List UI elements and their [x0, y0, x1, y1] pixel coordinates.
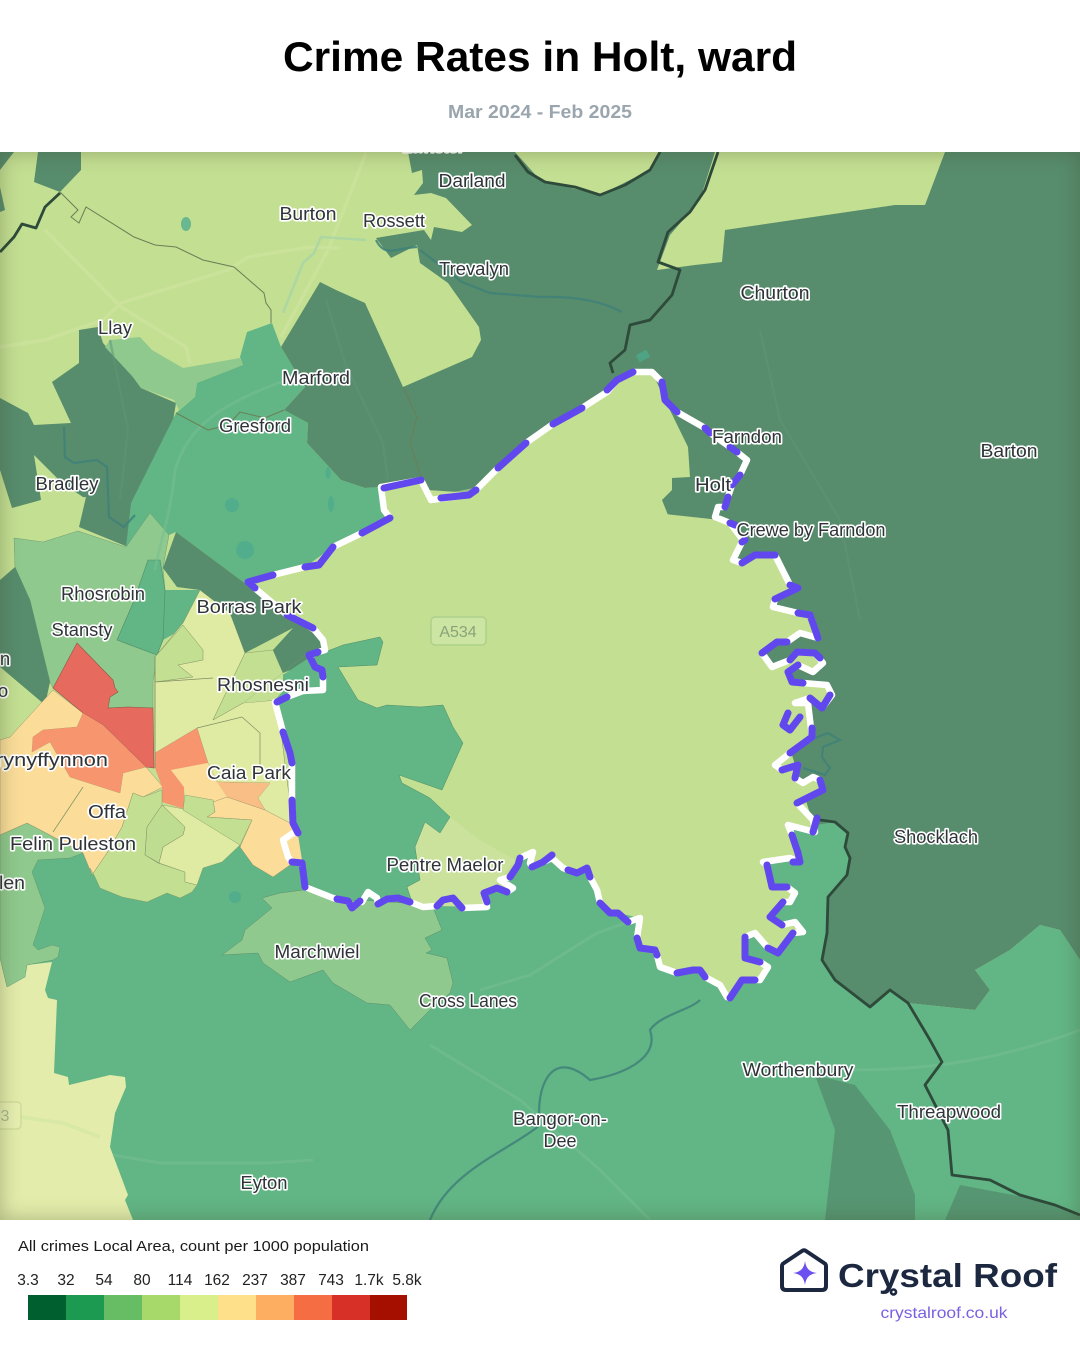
region: cream west Wrexham: [0, 690, 163, 875]
region: lime south Wrexham: [90, 790, 197, 902]
region: red high crime: [53, 643, 154, 768]
legend values: 5.8k: [392, 1272, 422, 1289]
region: dark Llay: [52, 327, 176, 547]
ward interior mid green area: [275, 637, 463, 904]
label: Llay: Llay: [98, 317, 133, 338]
ward fill: [248, 372, 832, 998]
label: Threapwood: Threapwood: [897, 1101, 1001, 1122]
label: Darland: Darland: [438, 170, 506, 191]
region: Gresford mid green: [126, 323, 390, 587]
label: Worthenbury: Worthenbury: [742, 1059, 854, 1080]
region: pale south-west: [0, 958, 133, 1220]
legend values: 54: [95, 1272, 113, 1289]
subtitle: date range: Mar 2024 - Feb 2025: [448, 101, 632, 122]
legend values: 1.7k: [354, 1272, 384, 1289]
road label: A534: A534: [439, 624, 477, 641]
label: Borras Park: Borras Park: [196, 596, 302, 617]
thin ward lines Wrexham: [53, 657, 260, 832]
logo wordmark: Crystal Roof: [838, 1258, 1058, 1295]
label: Offa: Offa: [88, 801, 127, 822]
region: far west dark: [0, 567, 50, 705]
legend values: 80: [133, 1272, 151, 1289]
label: Caia Park: Caia Park: [207, 762, 292, 783]
legend title: All crimes Local Area, count per 1000 population: [18, 1238, 369, 1255]
region: west lime: [0, 667, 42, 702]
label: Bangor-on-: Bangor-on-: [513, 1108, 607, 1129]
legend values: [17, 1272, 422, 1289]
legend values: 743: [318, 1272, 344, 1289]
region: pale orange Caia Park: [217, 782, 270, 810]
river dee: [64, 240, 840, 1220]
region: pale south Wrexham: [159, 805, 240, 885]
label: Crewe by Farndon: Crewe by Farndon: [736, 519, 886, 540]
label: Pentre Maelor: Pentre Maelor: [386, 854, 504, 875]
label: Shocklach: Shocklach: [894, 826, 978, 847]
region: cream Caia: [171, 763, 227, 802]
region: cream south-east Wrexham: [207, 797, 298, 877]
label: Burton: Burton: [280, 203, 336, 224]
label: Cross Lanes: Cross Lanes: [419, 990, 517, 1011]
region: lime Rhosnesni strip: [213, 650, 283, 720]
logo y ornament: [890, 1288, 897, 1296]
label: Farndon: Farndon: [712, 426, 782, 447]
region: dark patch near Worthenbury: [815, 1075, 915, 1220]
label: Churton: Churton: [740, 282, 810, 303]
region: Marchwiel: [222, 890, 453, 1030]
region: mid green south: [0, 822, 1080, 1220]
road label: A534: [431, 617, 486, 645]
region: lime Bradley: [33, 455, 83, 502]
ward corner pale: [243, 673, 283, 703]
roads over lime: [22, 330, 472, 1138]
icon: house outline: [782, 1250, 826, 1290]
ward boundary: [248, 372, 832, 998]
label: Rhosnesni: Rhosnesni: [217, 674, 309, 695]
label: Holt: Holt: [695, 474, 731, 495]
region: dark green north and east: [281, 152, 1080, 1010]
road label: A-road edge: [0, 1102, 21, 1129]
county border: [0, 152, 1080, 1215]
place labels: [0, 135, 1038, 1193]
label: Marford: Marford: [282, 367, 350, 388]
label: cut-off n: n: [0, 648, 10, 669]
legend values: 387: [280, 1272, 306, 1289]
label: Rossett: Rossett: [363, 210, 425, 231]
label: Eyton: Eyton: [240, 1172, 288, 1193]
label: Lavister: Lavister: [402, 135, 464, 156]
ward interior lighter lime area: [407, 817, 515, 907]
label: Stansty: Stansty: [52, 619, 113, 640]
label: Barton: Barton: [980, 440, 1038, 461]
roads through dark green: [110, 300, 860, 620]
ward outline purple dashes: [248, 372, 830, 998]
label: Bradley: Bradley: [36, 473, 99, 494]
roads over green: [113, 375, 1080, 1220]
region: Stansty mid green block: [117, 560, 165, 655]
region: dark patch south-east corner: [945, 1185, 1080, 1220]
region: orange Caia: [155, 728, 208, 809]
region: Stansty mid green: [163, 590, 200, 640]
ward outline white: [248, 372, 832, 998]
logo url: crystalroof.co.uk: [880, 1305, 1009, 1322]
region: orange Brynyffynnon: [32, 713, 146, 793]
legend colour scale: [28, 1295, 407, 1320]
title: Crime Rates in Holt, ward: [283, 33, 797, 80]
label: Gresford: Gresford: [219, 415, 291, 436]
region: dark north-west edge: [0, 152, 14, 170]
label: Rhosrobin: Rhosrobin: [61, 583, 145, 604]
ward corner cream patch: [283, 833, 302, 860]
region: Llay strip: [105, 337, 243, 410]
region: lime patch Wrexham inner: [145, 805, 185, 863]
region: Rhosrobin light green: [14, 513, 169, 708]
legend: [17, 1238, 422, 1320]
logo: Crystal Roof: [782, 1250, 1058, 1322]
region: dark Borras Park: [163, 532, 323, 673]
ward corner green sliver: [275, 657, 323, 702]
legend values: 237: [242, 1272, 268, 1289]
legend values: 114: [168, 1272, 193, 1289]
legend values: 3.3: [17, 1272, 39, 1289]
legend values: 32: [57, 1272, 75, 1289]
region: pale Rhosnesni: [155, 590, 293, 827]
stream near Rossett: [283, 237, 366, 313]
legend values: 162: [204, 1272, 230, 1289]
road label: A-road edge: 3: [1, 1108, 10, 1125]
label: Dee: Dee: [544, 1130, 576, 1151]
thin district lines: [60, 192, 421, 477]
region: lime Rhosnesni plot: [155, 625, 203, 682]
region: west light green: [0, 823, 83, 987]
region: dark north-west: [34, 152, 81, 192]
region: dark west: [0, 398, 86, 508]
icon: sparkle: [793, 1261, 817, 1285]
ward corner dark patch: [283, 643, 323, 673]
label: Trevalyn: Trevalyn: [439, 258, 509, 279]
region: dark north-west sliver: [0, 187, 5, 212]
label: Felin Puleston: Felin Puleston: [10, 833, 136, 854]
region: lime patch east of Offa: [183, 795, 252, 845]
label: Marchwiel: Marchwiel: [274, 941, 360, 962]
water bodies: [181, 217, 650, 903]
